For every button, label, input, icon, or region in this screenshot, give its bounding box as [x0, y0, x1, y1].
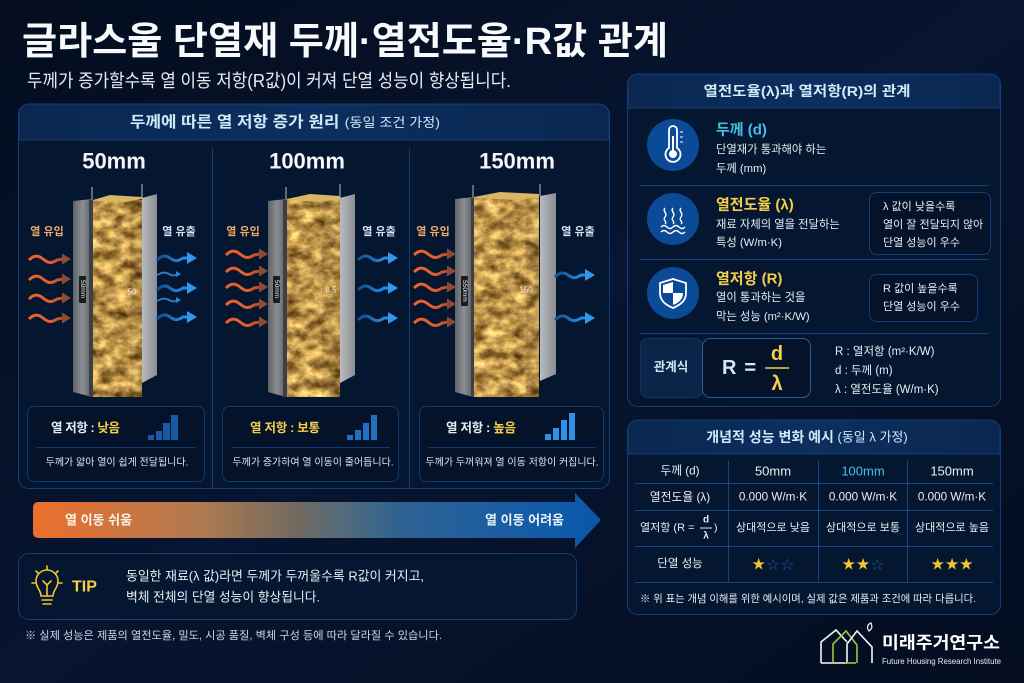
callout: high R: 단열 성능이 우수: [883, 300, 960, 313]
table note: ※ 위 표는 개념 이해를 위한 예시이며, 실제 값은 제품과 조건에 따라 다릅니다.: [640, 592, 976, 605]
formula: λ: [771, 373, 783, 395]
callout: high R: R 값이 높을수록: [883, 282, 958, 295]
row: thickness: 단열재가 통과해야 하는: [716, 142, 826, 156]
table row: conductivity: 0.000 W/m·K: [918, 490, 986, 504]
callout: low lambda: 열이 잘 전달되지 않아: [883, 218, 983, 231]
callout: low lambda: 단열 성능이 우수: [883, 236, 960, 249]
row: resistance: 열이 통과하는 것을: [716, 290, 805, 304]
card: high resistance: [420, 406, 604, 482]
heat in arrows 50mm: 열 유입: [30, 224, 64, 238]
thickness labels: [82, 148, 555, 174]
card: low resistance: [28, 406, 204, 482]
row: thickness: [716, 122, 826, 175]
panel: thickness principle: [18, 104, 610, 488]
wall section 50mm: 50mm: [79, 280, 86, 298]
formula: [702, 338, 810, 398]
heat in arrows 150mm: 열 유입: [416, 224, 450, 238]
table row: rating stars: ★★★: [930, 554, 974, 574]
tip text: 벽체 전체의 단열 성능이 향상됩니다.: [126, 590, 320, 604]
logo: 미래주거연구소: [882, 634, 1000, 652]
row: resistance: 막는 성능 (m²·K/W): [716, 310, 810, 323]
table row: resistance: 열저항 (R =: [640, 521, 695, 534]
card: medium resistance: 두께가 증가하여 열 이동이 줄어듭니다.: [232, 456, 394, 468]
formula legend: d : 두께 (m): [835, 364, 893, 377]
table row: rating stars: [657, 554, 974, 574]
row: conductivity: 재료 자체의 열을 전달하는: [716, 217, 840, 231]
panel heading: 개념적 성능 변화 예시 (동일 λ 가정): [706, 429, 908, 445]
wall section 100mm: 8.5: [325, 286, 337, 294]
card: low resistance: 두께가 얇아 열이 쉽게 전달됩니다.: [46, 456, 188, 468]
tip text: [126, 568, 424, 604]
title: 글라스울 단열재 두께·열전도율·R값 관계: [22, 21, 668, 63]
heat in arrows 150mm: [414, 224, 456, 328]
table row: thickness: 50mm: [755, 464, 791, 478]
thickness labels: 50mm: [82, 148, 146, 174]
heat out arrows 50mm: [157, 224, 197, 323]
table row: thickness: [660, 464, 974, 478]
panel: performance table: [628, 420, 1000, 614]
footnote: ※ 실제 성능은 제품의 열전도율, 밀도, 시공 품질, 벽체 구성 등에 따라 달라질 수 있습니다.: [25, 629, 442, 642]
wall section 100mm: [268, 184, 355, 397]
icon: shield: [647, 267, 699, 319]
logo: Future Housing Research Institute: [882, 656, 1001, 666]
icon: light bulb: [32, 566, 62, 604]
table row: resistance: ): [714, 522, 718, 534]
formula legend: λ : 열전도율 (W/m·K): [835, 383, 939, 396]
heat out arrows 100mm: 열 유출: [362, 224, 396, 238]
icon: heat waves: [647, 193, 699, 245]
formula: R =: [722, 357, 756, 379]
card: high resistance: 두께가 두꺼워져 열 이동 저항이 커집니다.: [425, 456, 599, 468]
heat in arrows 100mm: 열 유입: [226, 224, 260, 238]
row: resistance: 열저항 (R): [716, 270, 782, 288]
table row: conductivity: [650, 490, 986, 504]
card: high resistance: 열 저항 : 높음: [446, 420, 516, 435]
wall section 100mm: 50mm: [273, 280, 280, 298]
table row: resistance: 상대적으로 보통: [826, 521, 900, 534]
heat in arrows 100mm: [226, 224, 268, 328]
formula label: [640, 338, 702, 398]
icon: thermometer: [647, 119, 699, 171]
callout: high R: [870, 274, 978, 322]
wall section 150mm: [455, 184, 556, 397]
row: conductivity: 열전도율 (λ): [716, 196, 794, 214]
heat out arrows 150mm: [555, 224, 595, 324]
table row: resistance: d: [703, 514, 709, 526]
table row: resistance: λ: [703, 530, 709, 542]
table row: resistance: 상대적으로 높음: [915, 521, 989, 534]
table row: rating stars: ★★☆: [841, 554, 885, 574]
logo: [821, 623, 1001, 666]
table row: thickness: 150mm: [930, 464, 974, 478]
panel heading: 두께에 따른 열 저항 증가 원리 (동일 조건 가정): [130, 112, 440, 130]
tip text: 동일한 재료(λ 값)라면 두께가 두꺼울수록 R값이 커지고,: [126, 568, 424, 584]
card: medium resistance: 열 저항 : 보통: [250, 420, 320, 435]
callout: low lambda: λ 값이 낮을수록: [883, 200, 955, 213]
thickness labels: 150mm: [479, 148, 555, 174]
wall section 150mm: 150: [519, 286, 533, 294]
table row: thickness: 두께 (d): [660, 464, 700, 478]
thickness labels: 100mm: [269, 148, 345, 174]
subtitle: 두께가 증가할수록 열 이동 저항(R값)이 커져 단열 성능이 향상됩니다.: [27, 71, 511, 91]
table row: conductivity: 열전도율 (λ): [650, 490, 710, 504]
table row: thickness: 100mm: [841, 464, 885, 478]
gradient arrow: heat transfer ease: 열 이동 쉬움: [65, 512, 132, 528]
row: thickness: 두께 (mm): [716, 162, 767, 175]
row: conductivity: 특성 (W/m·K): [716, 236, 782, 249]
callout: low lambda: [870, 192, 990, 254]
tip box: [18, 554, 576, 620]
row: conductivity: [716, 196, 840, 249]
tip box: TIP: [72, 578, 97, 596]
formula: d: [771, 343, 783, 365]
table row: resistance: [640, 514, 989, 542]
panel: conductivity and resistance: [628, 74, 1000, 406]
heat out arrows 150mm: 열 유출: [561, 224, 595, 238]
card: medium resistance: [222, 406, 398, 482]
table row: resistance: 상대적으로 낮음: [736, 521, 810, 534]
wall section 50mm: 50: [128, 288, 137, 296]
wall section 150mm: 550mm: [461, 280, 468, 302]
card: low resistance: 열 저항 : 낮음: [51, 420, 120, 435]
heat in arrows 50mm: [29, 224, 71, 324]
gradient arrow: heat transfer ease: [33, 493, 601, 548]
icon: houses: [821, 623, 872, 663]
row: resistance: [716, 270, 810, 323]
wall section 50mm: [73, 184, 157, 397]
heat out arrows 100mm: [358, 224, 398, 324]
formula label: 관계식: [654, 360, 688, 374]
row: thickness: 두께 (d): [716, 122, 767, 138]
gradient arrow: heat transfer ease: 열 이동 어려움: [485, 512, 564, 528]
table row: conductivity: 0.000 W/m·K: [829, 490, 897, 504]
table row: conductivity: 0.000 W/m·K: [739, 490, 807, 504]
formula legend: [835, 345, 939, 396]
heat out arrows 50mm: 열 유출: [162, 224, 196, 238]
formula legend: R : 열저항 (m²·K/W): [835, 345, 935, 358]
panel heading: 열전도율(λ)과 열저항(R)의 관계: [704, 83, 910, 99]
table row: rating stars: ★☆☆: [751, 554, 795, 574]
table row: rating stars: 단열 성능: [657, 557, 703, 570]
